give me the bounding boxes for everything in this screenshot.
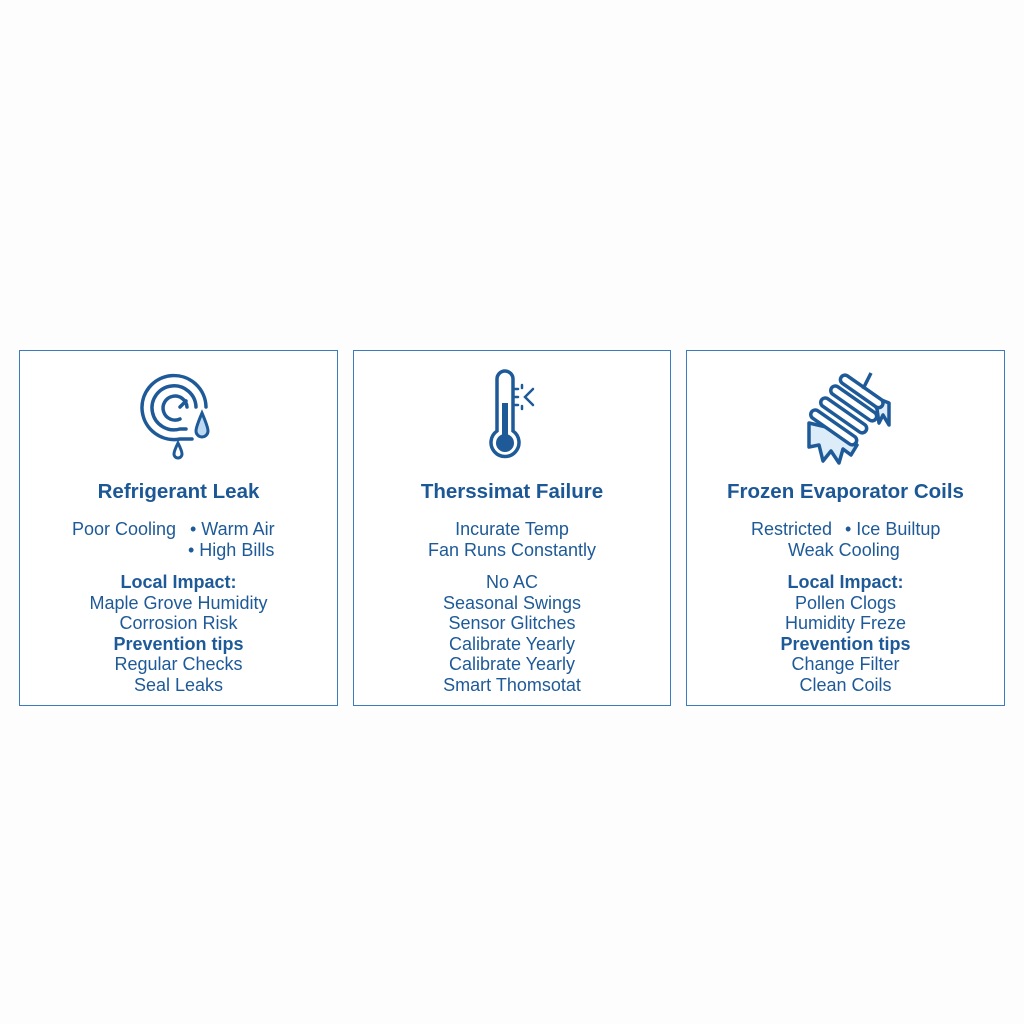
symptoms: Poor Cooling — [72, 519, 176, 539]
local impact and prevention: Local Impact: — [787, 572, 904, 592]
local impact and prevention: Seal Leaks — [134, 675, 223, 695]
local impact and prevention: Humidity Freze — [785, 613, 906, 633]
panel: thermostat failure: Smart Thomsotat — [443, 675, 581, 695]
local impact and prevention: Regular Checks — [114, 654, 243, 674]
symptoms — [72, 519, 275, 560]
local impact and prevention: Change Filter — [791, 654, 900, 674]
local impact and prevention: Prevention tips — [113, 634, 244, 654]
symptoms — [751, 519, 940, 560]
local impact and prevention: Pollen Clogs — [795, 593, 896, 613]
panel: frozen evaporator coils — [686, 350, 1005, 706]
symptoms: • High Bills — [188, 540, 274, 560]
icon: thermometer — [489, 369, 534, 458]
local impact and prevention — [89, 572, 268, 695]
icon: spiral with drops — [140, 374, 210, 460]
symptoms: • Warm Air — [190, 519, 275, 539]
local impact and prevention — [780, 572, 911, 695]
local impact and prevention: Prevention tips — [780, 634, 911, 654]
panel: thermostat failure: Seasonal Swings — [443, 593, 581, 613]
local impact and prevention: Local Impact: — [120, 572, 237, 592]
title: Therssimat Failure — [421, 480, 603, 503]
panel: thermostat failure: Calibrate Yearly — [449, 634, 575, 654]
symptoms: • Ice Builtup — [845, 519, 940, 539]
local impact and prevention: Maple Grove Humidity — [89, 593, 268, 613]
symptoms: Restricted — [751, 519, 832, 539]
local impact and prevention: Clean Coils — [799, 675, 892, 695]
icon: frozen coils — [807, 372, 891, 465]
title: Refrigerant Leak — [98, 480, 259, 503]
details — [428, 519, 596, 560]
panel: thermostat failure: Sensor Glitches — [448, 613, 576, 633]
panel: thermostat failure: Calibrate Yearly — [449, 654, 575, 674]
symptoms: Weak Cooling — [788, 540, 900, 560]
panel: thermostat failure: No AC — [486, 572, 538, 592]
title: Frozen Evaporator Coils — [727, 480, 964, 503]
panel: thermostat failure — [353, 350, 671, 706]
local impact and prevention: Corrosion Risk — [119, 613, 238, 633]
panel: refrigerant leak — [19, 350, 338, 706]
details: Fan Runs Constantly — [428, 540, 596, 560]
details: Incurate Temp — [455, 519, 569, 539]
